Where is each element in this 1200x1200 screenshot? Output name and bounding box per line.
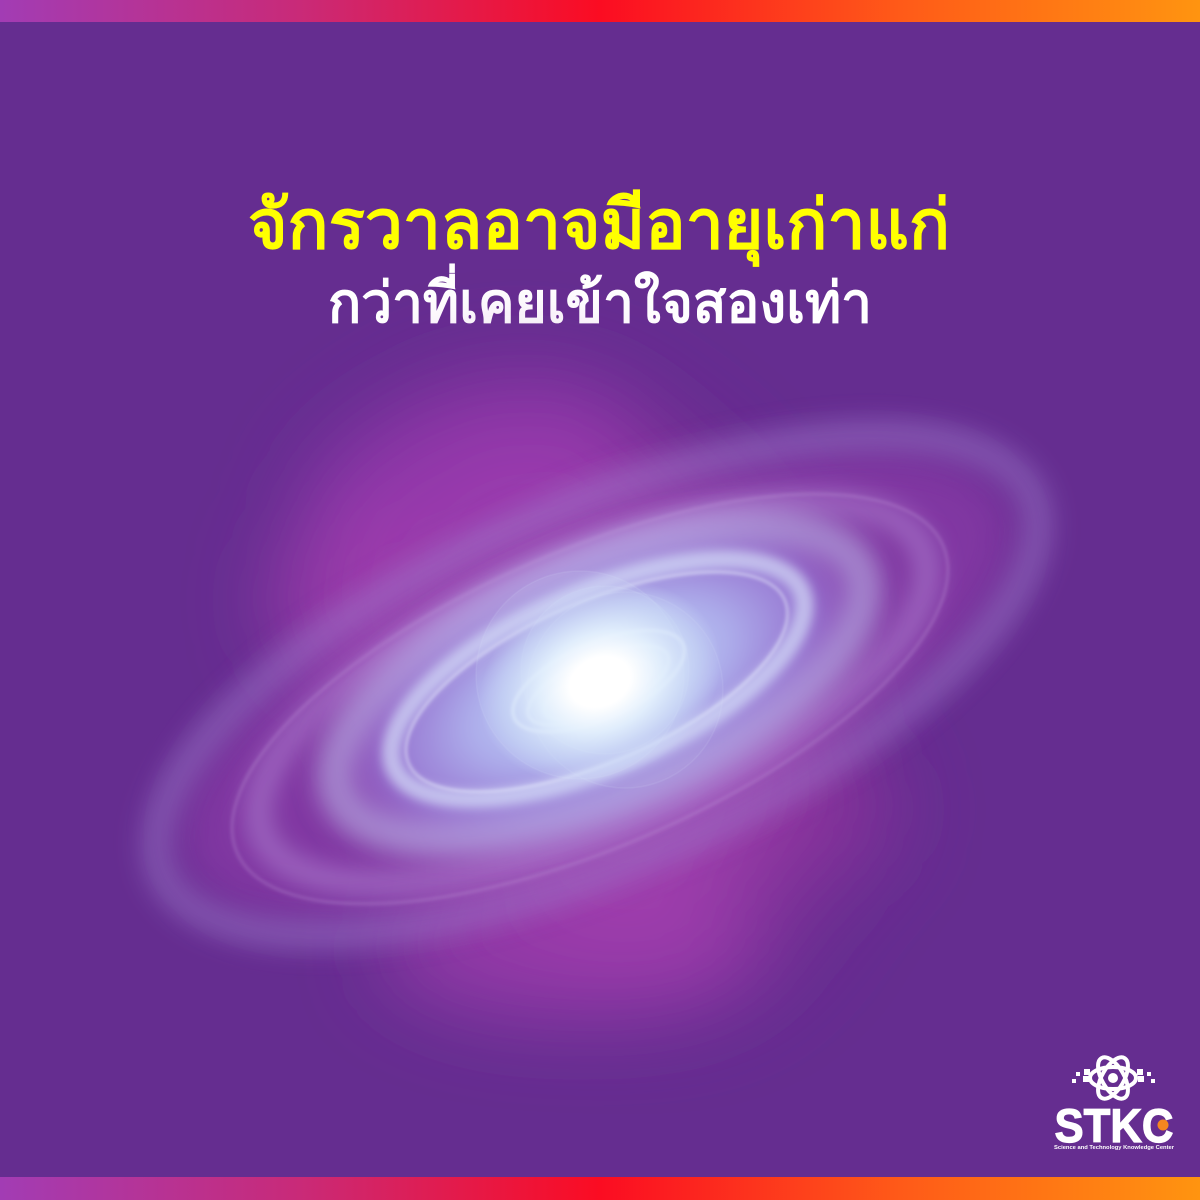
STKC logo [1054,1053,1175,1152]
logo tagline: Science and Technology Knowledge Center [1054,1145,1175,1151]
lens circles around the core [476,571,723,788]
title line 2: กว่าที่เคยเข้าใจสองเท่า [328,263,872,334]
inner bright arm [359,510,836,848]
title [248,187,950,334]
core swirl rings [499,610,698,753]
outer arm glow [90,332,1104,1038]
galaxy illustration [90,237,1104,1143]
logo wordmark: STKC [1054,1099,1174,1152]
inner thin arm [377,527,817,837]
purple wash along the galaxy plane [117,350,1077,1020]
logo atom mark [1090,1053,1136,1103]
middle arm [207,422,978,962]
top gradient bar [0,0,1200,22]
broad light band [291,461,908,905]
logo orange dot [1158,1120,1168,1130]
title line 1: จักรวาลอาจมีอายุเก่าแก่ [248,187,950,267]
logo side pixels [1072,1069,1155,1083]
faint outer thin arm [178,410,1002,988]
bright galactic core [447,544,753,820]
bottom gradient bar [0,1177,1200,1200]
tilted galaxy disc and arms [90,332,1104,1038]
inner disc fill [267,431,933,936]
magenta nebula glow [178,237,1002,1143]
